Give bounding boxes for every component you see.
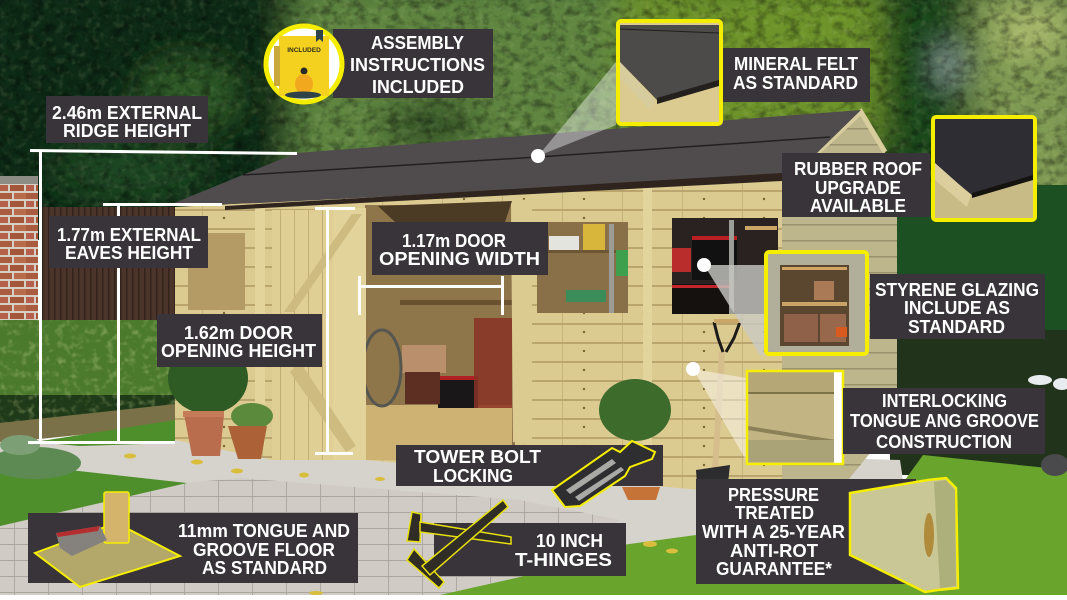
- label: interlocking construction: TONGUE ANG GROOVE: [850, 411, 1039, 431]
- label: eaves height: EAVES HEIGHT: [65, 243, 193, 263]
- label: assembly instructions: [333, 29, 493, 98]
- label: tower bolt: TOWER BOLT: [414, 447, 541, 467]
- icon: instruction book: INCLUDED: [287, 47, 321, 54]
- rock: [1041, 454, 1067, 476]
- label: mineral felt: [723, 48, 870, 102]
- roof: [167, 110, 861, 210]
- label: styrene glazing: STANDARD: [908, 317, 1005, 337]
- label: tower bolt: [396, 445, 663, 486]
- eaves height line: [103, 203, 222, 441]
- trees and sky: [0, 0, 1067, 240]
- label: interlocking construction: CONSTRUCTION: [876, 432, 1012, 452]
- icon: timber board: [850, 478, 958, 592]
- right hedge: [890, 185, 1067, 475]
- mineral beam: [538, 62, 616, 156]
- open door: [272, 208, 366, 460]
- left lawn: [0, 468, 187, 526]
- label: door width: OPENING WIDTH: [379, 249, 540, 269]
- front wall: [175, 175, 782, 490]
- dimension lines: [28, 149, 504, 455]
- shed: [167, 110, 897, 490]
- label: t-hinges: 10 INCH: [536, 531, 603, 551]
- interlocking beam: [693, 369, 746, 460]
- dot: wall: [686, 362, 700, 376]
- white footer: [0, 595, 1067, 600]
- brick wall: [0, 176, 38, 326]
- icon: t-hinges: [407, 500, 511, 588]
- label: pressure treated: WITH A 25-YEAR: [702, 522, 845, 542]
- glazing beam: [704, 265, 764, 355]
- label: door height: OPENING HEIGHT: [161, 341, 316, 361]
- label: pressure treated: [696, 479, 916, 584]
- window 1: [537, 222, 628, 313]
- label: mineral felt: MINERAL FELT: [734, 54, 858, 74]
- label: pressure treated: TREATED: [735, 503, 814, 523]
- callout beams: [531, 62, 764, 460]
- dot: roof: [531, 149, 545, 163]
- label: pressure treated: ANTI-ROT: [730, 541, 818, 561]
- small plant: [228, 403, 273, 459]
- label: styrene glazing: [870, 274, 1045, 339]
- fence: [40, 207, 175, 322]
- label: interlocking construction: INTERLOCKING: [882, 391, 1007, 411]
- window 2: [672, 218, 778, 314]
- spade: [696, 319, 741, 500]
- label: door width: 1.17m DOOR: [402, 231, 506, 251]
- label: ridge height: 2.46m EXTERNAL: [52, 103, 202, 123]
- label: styrene glazing: STYRENE GLAZING: [875, 280, 1039, 300]
- fallen leaves: [124, 454, 678, 595]
- inset: styrene glazing: [766, 252, 867, 354]
- side wall: [780, 112, 897, 490]
- door width line: [358, 276, 504, 315]
- label: door width: [372, 222, 548, 275]
- label: assembly instructions: INCLUDED: [372, 77, 464, 97]
- label: assembly instructions: ASSEMBLY: [371, 33, 464, 53]
- label: pressure treated: PRESSURE: [728, 485, 819, 505]
- inset: interlocking boards: [747, 371, 843, 464]
- icon: tower bolt: [552, 441, 655, 507]
- label: rubber roof: AVAILABLE: [810, 196, 906, 216]
- concrete ground: [0, 440, 920, 595]
- label: interlocking construction: [843, 388, 1045, 454]
- label: door height: 1.62m DOOR: [184, 323, 293, 343]
- label: styrene glazing: INCLUDE AS: [904, 298, 1010, 318]
- inset: rubber roof: [933, 117, 1035, 220]
- timber border: [0, 404, 175, 442]
- interior items: [402, 345, 446, 373]
- label: floor: [28, 513, 358, 583]
- left hedge: [0, 320, 180, 425]
- brick paving: [0, 478, 620, 595]
- right hedge flowers: [1028, 375, 1067, 390]
- icon: floor pack: [35, 492, 180, 587]
- right door leaf: [511, 197, 532, 445]
- label: tower bolt: LOCKING: [433, 466, 513, 486]
- plants and pots: [168, 319, 741, 500]
- right lawn: [440, 455, 1067, 595]
- dot: window: [697, 258, 711, 272]
- label: floor: GROOVE FLOOR: [193, 540, 335, 560]
- right plant: [599, 379, 671, 500]
- back lawn: [35, 420, 175, 446]
- label: assembly instructions: INSTRUCTIONS: [350, 55, 485, 75]
- corner posts: [255, 185, 652, 485]
- door height line: [315, 207, 355, 455]
- label: rubber roof: RUBBER ROOF: [794, 159, 922, 179]
- label: eaves height: 1.77m EXTERNAL: [57, 225, 201, 245]
- inset: mineral felt: [618, 21, 721, 124]
- label: mineral felt: AS STANDARD: [733, 73, 858, 93]
- label: rubber roof: UPGRADE: [815, 178, 901, 198]
- door opening interior: [363, 201, 515, 462]
- label: floor: AS STANDARD: [202, 558, 327, 578]
- left plant: [168, 342, 248, 456]
- gable trim: [818, 112, 885, 152]
- icon: instruction book: [266, 26, 342, 102]
- label: pressure treated: GUARANTEE*: [716, 559, 832, 579]
- left window: [188, 233, 245, 310]
- label: rubber roof: [782, 153, 930, 217]
- label: t-hinges: [434, 523, 626, 576]
- foliage bush: [0, 435, 81, 479]
- label: ridge height: RIDGE HEIGHT: [63, 121, 191, 141]
- label: floor: 11mm TONGUE AND: [178, 521, 350, 541]
- ridge height line: [28, 149, 297, 444]
- label: t-hinges: T-HINGES: [515, 550, 612, 570]
- label: door height: [157, 314, 322, 367]
- label: ridge height: [46, 96, 208, 143]
- label: eaves height: [49, 216, 208, 268]
